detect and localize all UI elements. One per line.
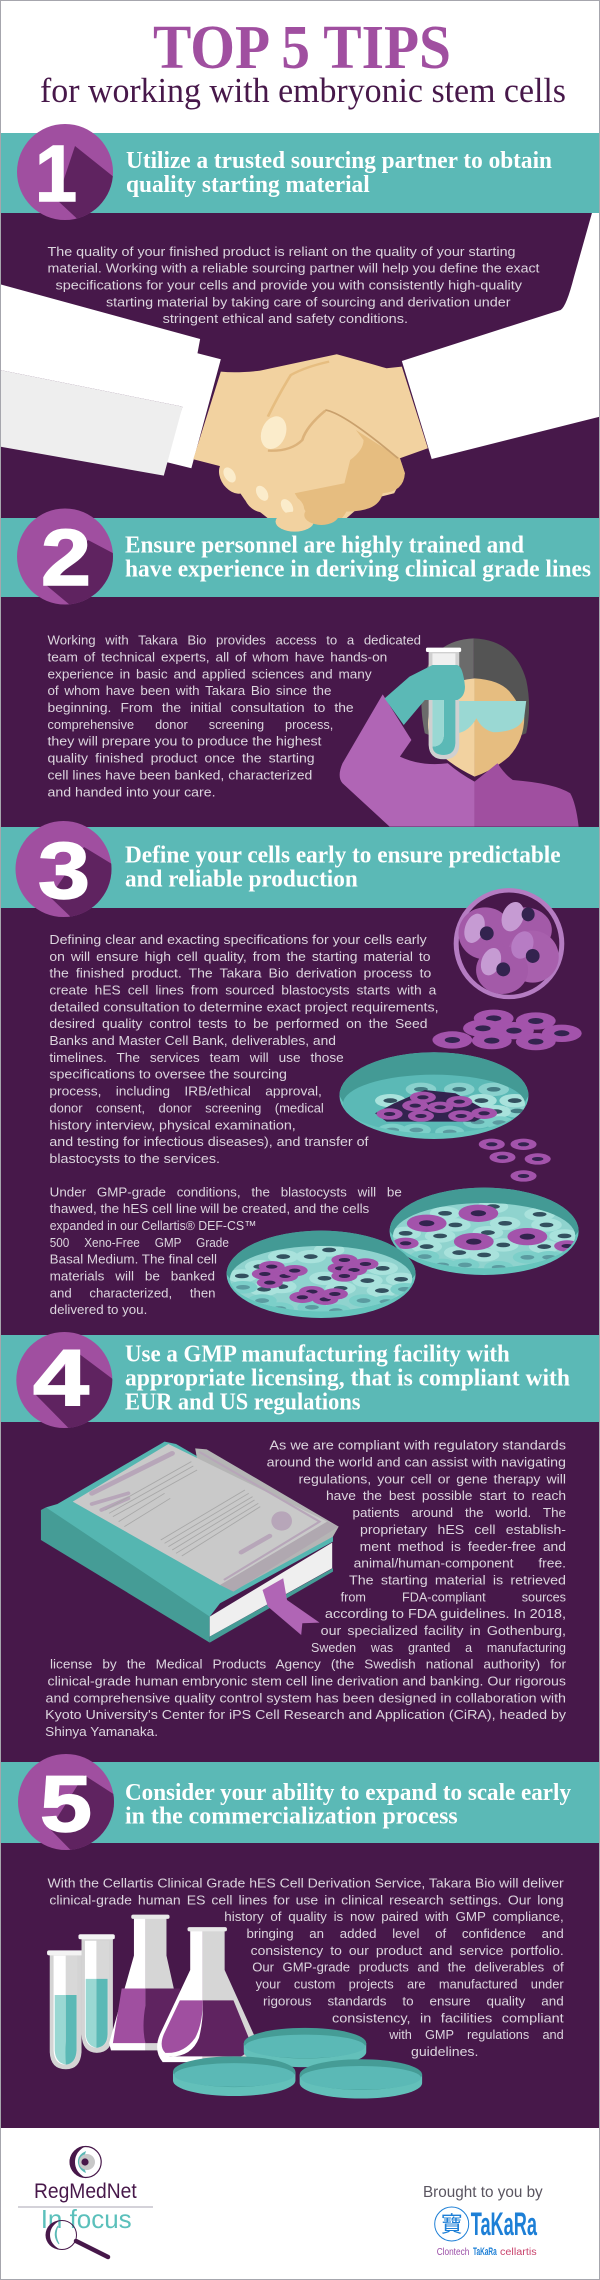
icon: number 3 badge: 3 xyxy=(38,826,90,915)
icon: number 2 badge xyxy=(17,508,113,604)
icon: number 5 badge xyxy=(18,1754,114,1850)
tip 3 body text: specifications to oversee the sourcing xyxy=(49,1067,287,1082)
tip 3 body text: donor consent, donor screening (medical xyxy=(49,1100,324,1115)
tip 4 body text: As we are compliant with regulatory standards xyxy=(269,1438,566,1453)
illustration: petri dish with cell colony xyxy=(339,1052,533,1139)
illustration: petri dish upper right xyxy=(390,1188,580,1275)
tip 3 body text: desired quality control tests to be performed on the Seed xyxy=(49,1016,428,1031)
test tube left xyxy=(47,1950,83,2069)
tip 5 body text: rigorous standards to ensure quality and xyxy=(263,1993,564,2008)
tip 4 body text: regulations, your cell or gene therapy will xyxy=(298,1471,566,1486)
tip 5 header band xyxy=(0,1762,600,1843)
tip 3 body text: on will ensure high cell quality, from the starting material to xyxy=(49,949,431,964)
tip 2 heading xyxy=(125,533,591,583)
icon: number 3 badge xyxy=(16,821,112,917)
tip 3 body text: history interview, physical examination, xyxy=(49,1117,296,1132)
icon: number 1 badge xyxy=(17,124,113,220)
illustration: blastocyst xyxy=(456,890,562,997)
tip 2 body text: they will prepare you to produce the highest xyxy=(48,734,322,749)
tip 4 heading: EUR and US regulations xyxy=(125,1389,360,1415)
icon: number 1 badge: 1 xyxy=(35,129,77,218)
illustration: petri dish lower left xyxy=(227,1231,419,1318)
tip 4 body text: around the world and can assist with navigating xyxy=(267,1454,566,1470)
tip 2 body text xyxy=(48,633,421,799)
tip 1 body text: stringent ethical and safety conditions. xyxy=(163,311,408,326)
tip 4 body text: from FDA-compliant sources xyxy=(341,1589,566,1604)
tip 3 body text: process, including IRB/ethical approval, xyxy=(49,1084,322,1099)
icon: number 4 badge: 4 xyxy=(33,1333,90,1422)
illustration: flasks, test tubes and closed dishes xyxy=(47,1915,422,2099)
tip 1 heading: quality starting material xyxy=(126,172,370,198)
tip 5 heading: in the commercialization process xyxy=(125,1804,458,1830)
closed dish top xyxy=(244,2028,366,2067)
back flask xyxy=(109,1915,191,2050)
tip 4 body text: according to FDA guidelines. In 2018, xyxy=(325,1606,566,1621)
logo: Takara: TaKaRa xyxy=(471,2206,537,2242)
logo: Takara: TaKaRa xyxy=(473,2246,497,2258)
tip 3 body text: detailed consultation to determine exact project requirements, xyxy=(49,999,439,1014)
tip 1 body text: The quality of your finished product is reliant on the quality of your starting xyxy=(48,244,516,259)
illustration: loose cells xyxy=(479,1139,551,1182)
tip 2 body text: comprehensive donor screening process, xyxy=(48,717,333,732)
tip 5 body text xyxy=(48,1876,564,2059)
tip 4 heading: appropriate licensing, that is compliant with xyxy=(125,1366,570,1392)
tip 3 body text xyxy=(49,932,439,1317)
tip 5 body text: consistency to our product and service portfolio. xyxy=(251,1943,564,1958)
tip 3 body text: timelines. The services team will use those xyxy=(49,1050,344,1065)
logo: RegMedNet In focus xyxy=(18,2146,153,2257)
tip 5 body text: clinical-grade human ES cell lines for use in clinical research settings. Our long xyxy=(49,1892,564,1907)
illustration: handshake xyxy=(0,195,600,532)
tip 5 body text: your custom projects are manufactured under xyxy=(256,1977,564,1992)
logo: RegMedNet In focus: RegMedNet xyxy=(34,2180,137,2203)
tip 5 body text: guidelines. xyxy=(411,2044,478,2059)
footer white panel xyxy=(0,2128,600,2280)
tip 5 body text: bringing an added level of confidence and xyxy=(246,1926,564,1941)
tip 1 body text xyxy=(48,244,540,326)
title xyxy=(40,14,566,110)
front flask xyxy=(157,1927,255,2062)
tip 4 body text: patients around the world. The xyxy=(352,1505,566,1520)
tip 1 body text: starting material by taking care of sourcing and derivation under xyxy=(106,294,511,309)
hand fingertips over band 2 xyxy=(276,505,339,532)
icon: spiral xyxy=(70,2146,101,2178)
tip 4 body text: clinical-grade human embryonic stem cell line derivation and banking. Our rigorous xyxy=(48,1674,566,1688)
tip 2 body text: Working with Takara Bio provides access to a dedicated xyxy=(48,633,421,648)
illustration: cell cluster xyxy=(432,1010,582,1050)
sponsor credit xyxy=(423,2184,543,2258)
tip 1 body text: material. Working with a reliable sourcing partner will help you define the exact xyxy=(48,261,540,276)
icon: number 2 badge: 2 xyxy=(41,513,91,602)
tip 1 header band xyxy=(0,133,600,213)
tip 3 body text: materials will be banked xyxy=(50,1268,215,1284)
tip 5 heading: Consider your ability to expand to scale early xyxy=(125,1780,571,1806)
tip 2 header band xyxy=(0,518,600,597)
tip 3 body text: create hES cell lines from sourced blastocysts starts with a xyxy=(49,982,437,998)
tip 5 body text: consistency, in facilities compliant xyxy=(332,2010,564,2025)
title: for working with embryonic stem cells xyxy=(40,71,566,110)
tip 2 body text: experience in basic and applied sciences and many xyxy=(48,666,372,681)
icon: number 4 badge xyxy=(16,1332,112,1428)
closed dish left xyxy=(173,2056,295,2096)
tip 3 header band xyxy=(0,827,600,908)
tip 4 body text: The starting material is retrieved xyxy=(349,1572,566,1587)
tip 4 body text: animal/human-component free. xyxy=(354,1556,566,1571)
tip 4 body text: Shinya Yamanaka. xyxy=(45,1724,158,1739)
icon: magnifying glass xyxy=(45,2220,108,2257)
tip 3 heading: and reliable production xyxy=(125,867,358,893)
sponsor credit: Brought to you by xyxy=(423,2184,543,2201)
tip 5 body text: Our GMP-grade products and the deliverables of xyxy=(252,1960,564,1975)
tip 5 heading xyxy=(125,1780,571,1830)
tip 3 body text: expanded in our Cellartis® DEF-CS™ xyxy=(50,1218,256,1233)
tip 3 heading xyxy=(125,843,561,893)
tip 1 body text: specifications for your cells and provide you with consistently high-quality xyxy=(56,278,522,292)
tip 4 body text: Sweden was granted a manufacturing xyxy=(311,1640,566,1655)
tip 5 body text: With the Cellartis Clinical Grade hES Cell Derivation Service, Takara Bio will deliver xyxy=(48,1876,564,1890)
tip 4 body text: have the best possible start to reach xyxy=(326,1488,566,1503)
tip 3 body text: and characterized, then xyxy=(50,1285,216,1300)
tip 4 heading: Use a GMP manufacturing facility with xyxy=(125,1342,510,1368)
tip 3 body text: the finished product. The Takara Bio derivation process to xyxy=(49,966,431,981)
tip 3 body text: 500 Xeno-Free GMP Grade xyxy=(50,1235,229,1250)
tip 3 body text: Under GMP-grade conditions, the blastocysts will be xyxy=(50,1184,402,1199)
icon: number 5 badge: 5 xyxy=(40,1759,92,1848)
tip 4 body text: ment method is feeder-free and xyxy=(360,1539,566,1554)
tip 3 body text: and testing for infectious diseases), and transfer of xyxy=(49,1134,369,1149)
illustration: book with certificate xyxy=(41,1442,339,1643)
tip 2 body text: and handed into your care. xyxy=(48,784,216,799)
illustration: scientist with test tube xyxy=(340,638,579,827)
tip 2 heading: have experience in deriving clinical grade lines xyxy=(125,557,591,583)
tip 1 heading: Utilize a trusted sourcing partner to obtain xyxy=(126,148,552,174)
tip 4 body text: and comprehensive quality control system has been designed in collaboration with xyxy=(46,1690,566,1705)
tip 4 body text: Kyoto University's Center for iPS Cell Research and Application (CiRA), headed by xyxy=(45,1707,566,1722)
tip 3 body text: thawed, the hES cell line will be created, and the cells xyxy=(50,1201,370,1216)
tip 4 body text xyxy=(45,1438,567,1739)
logo: RegMedNet In focus: In focus xyxy=(41,2204,132,2234)
tip 3 body text: Banks and Master Cell Bank, deliverables, and xyxy=(49,1033,336,1048)
tip 4 body text: proprietary hES cell establish- xyxy=(360,1522,566,1537)
tip 3 heading: Define your cells early to ensure predictable xyxy=(125,843,561,869)
tip 2 body text: quality finished product once the starting xyxy=(48,751,315,766)
tip 3 body text: Basal Medium. The final cell xyxy=(50,1252,217,1267)
tip 3 body text: Defining clear and exacting specifications for your cells early xyxy=(49,932,427,947)
tip 2 body text: of whom have been with Takara Bio since the xyxy=(48,683,331,698)
logo: Takara: 寶 xyxy=(441,2212,463,2237)
tip 2 body text: beginning. From the initial consultation to the xyxy=(48,700,354,715)
tip 4 header band xyxy=(0,1335,600,1422)
tip 5 body text: with GMP regulations and xyxy=(388,2027,564,2042)
tip 2 body text: cell lines have been banked, characterized xyxy=(48,767,312,782)
title: TOP 5 TIPS xyxy=(153,14,451,82)
closed dish right xyxy=(300,2059,422,2099)
tip 1 heading xyxy=(126,148,552,198)
test tube right xyxy=(78,1934,115,2053)
tip 3 body text: delivered to you. xyxy=(50,1302,147,1317)
logo: Takara: cellartis xyxy=(500,2247,537,2258)
tip 4 heading xyxy=(125,1342,570,1415)
logo: Takara: Clontech xyxy=(437,2247,469,2258)
tip 5 body text: history of quality is now paired with GMP compliance, xyxy=(224,1909,564,1924)
tip 2 heading: Ensure personnel are highly trained and xyxy=(125,533,525,559)
logo: Takara xyxy=(435,2206,537,2258)
tip 3 body text: blastocysts to the services. xyxy=(49,1151,220,1166)
tip 2 body text: team of technical experts, all of whom have hands-on xyxy=(48,650,387,664)
tip 4 body text: our specialized facility in Gothenburg, xyxy=(321,1623,566,1638)
tip 4 body text: license by the Medical Products Agency (the Swedish national authority) for xyxy=(50,1657,567,1672)
